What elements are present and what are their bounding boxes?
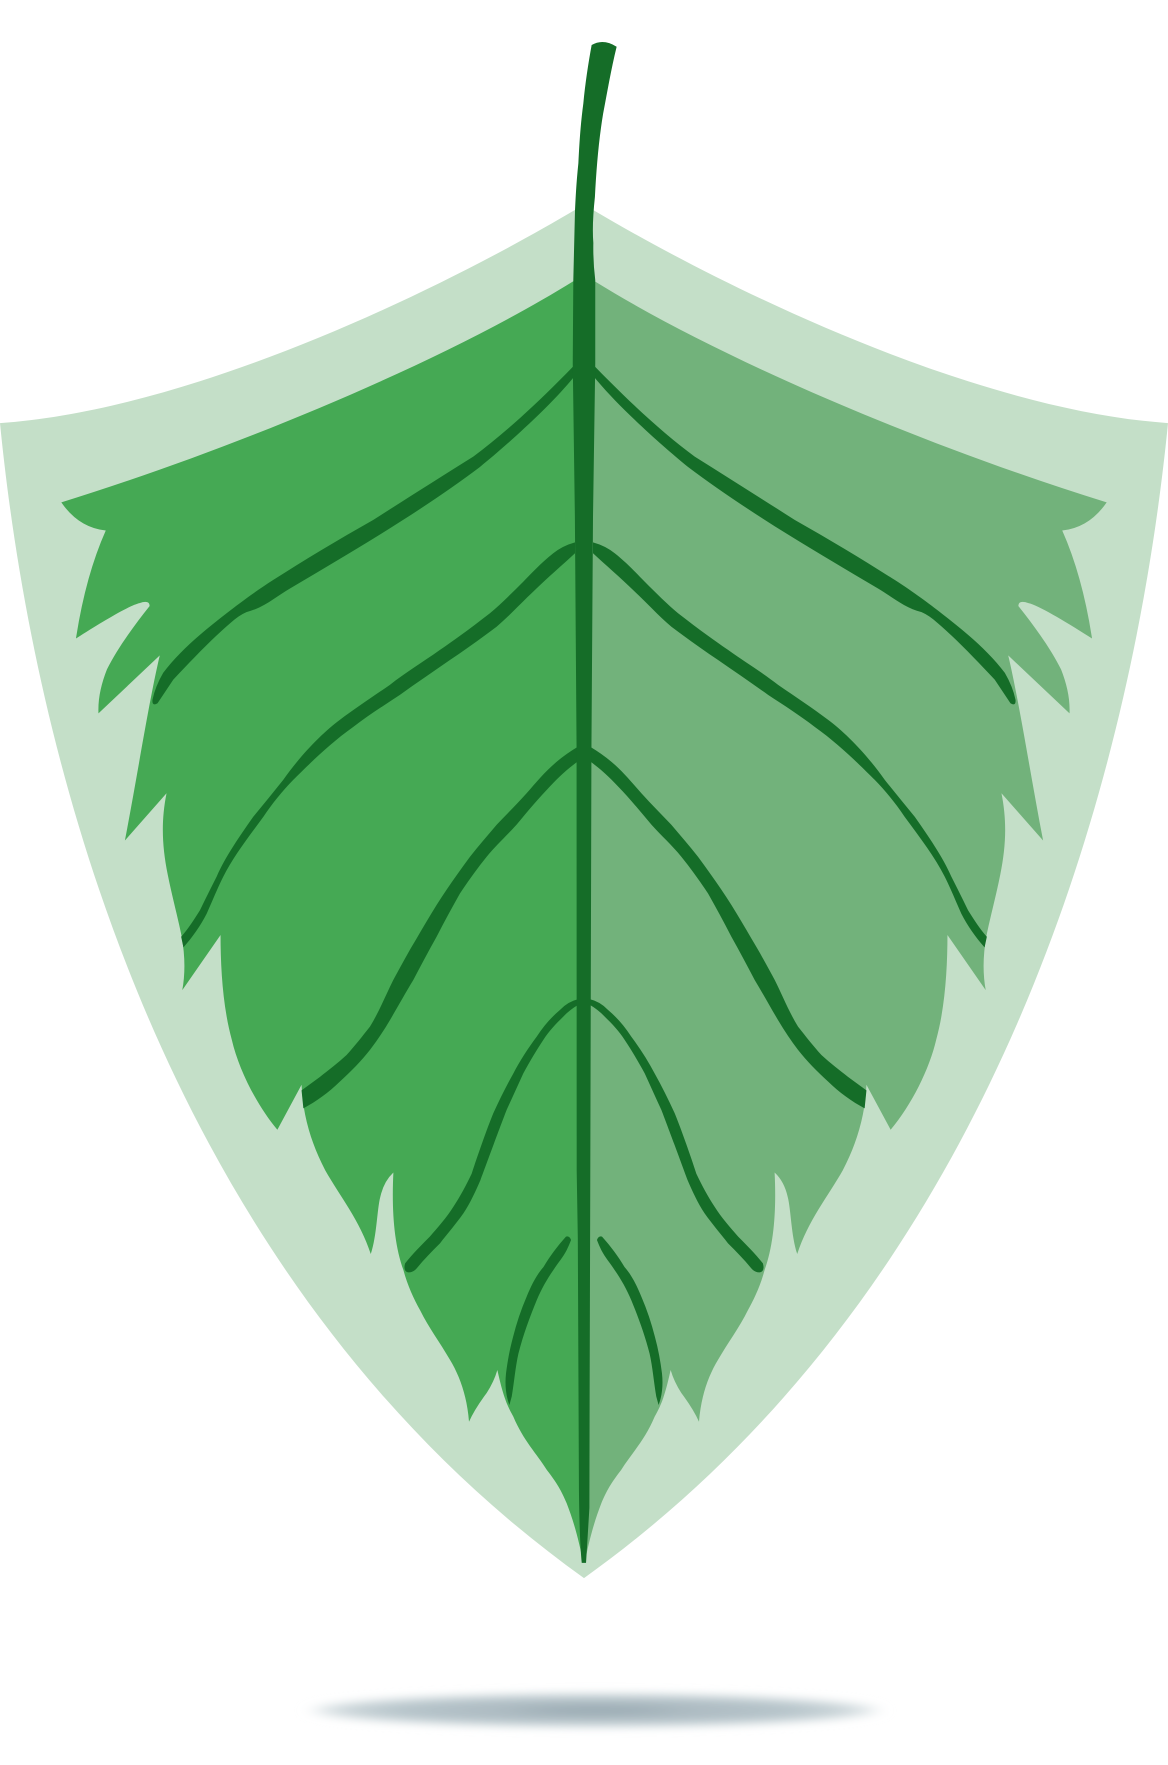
vein 1 right (594, 366, 1016, 704)
vein 3 right (591, 747, 866, 1108)
vein 2 left (181, 542, 575, 947)
leaf: left half (61, 281, 585, 1563)
veins: left side (152, 366, 578, 1405)
vein 2 right (593, 542, 987, 947)
vein 5 right (597, 1236, 662, 1405)
leaf: right half (584, 281, 1107, 1563)
veins: right side (590, 366, 1016, 1405)
stem and midrib (573, 42, 617, 1563)
vein 1 left (152, 366, 574, 704)
vein 3 left (302, 747, 577, 1108)
vein 5 left (506, 1236, 571, 1405)
shield background (0, 209, 1168, 1578)
vein 4 left (404, 999, 578, 1272)
ground shadow (314, 1693, 877, 1727)
vein 4 right (590, 999, 764, 1272)
